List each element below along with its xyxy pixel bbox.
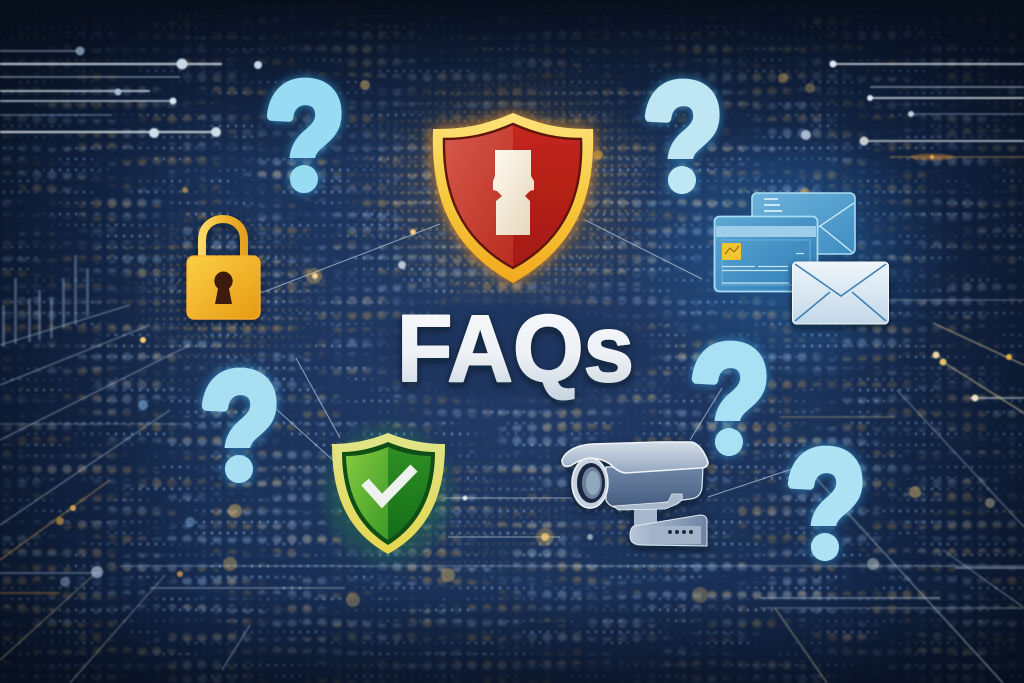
camera hood xyxy=(562,442,708,473)
check mark xyxy=(365,468,414,501)
camera mount xyxy=(630,508,707,546)
connector lines xyxy=(258,220,795,537)
icon: question mark lower right: ? xyxy=(786,419,866,595)
camera body xyxy=(606,467,703,509)
icon: red warning shield xyxy=(433,113,593,283)
white envelope xyxy=(792,262,888,324)
shield keyhole emblem xyxy=(493,150,534,235)
icon: mail and card stack xyxy=(714,193,888,324)
icon: question mark lower right xyxy=(782,439,869,567)
bokeh light nodes xyxy=(56,46,1012,607)
title: FAQs: FAQs xyxy=(397,296,634,402)
perspective diagonals xyxy=(0,305,1024,683)
icon: question mark right xyxy=(686,334,773,462)
icon: question mark left xyxy=(196,361,283,489)
bar chart backdrop xyxy=(2,255,89,347)
icon: question mark right: ? xyxy=(690,314,770,490)
back envelope xyxy=(752,193,855,254)
icon: question mark top right: ? xyxy=(643,52,723,228)
icon: security camera xyxy=(562,442,708,546)
icon: gold padlock xyxy=(187,219,260,319)
icon: question mark top right xyxy=(638,72,726,200)
icon: question mark top left xyxy=(260,70,348,199)
icon: question mark top left: ? xyxy=(265,51,345,227)
icon: question mark left: ? xyxy=(200,341,280,517)
camera lens xyxy=(572,458,608,508)
credit card xyxy=(714,216,818,292)
padlock keyhole xyxy=(214,271,233,304)
icon: green check shield xyxy=(316,416,460,572)
